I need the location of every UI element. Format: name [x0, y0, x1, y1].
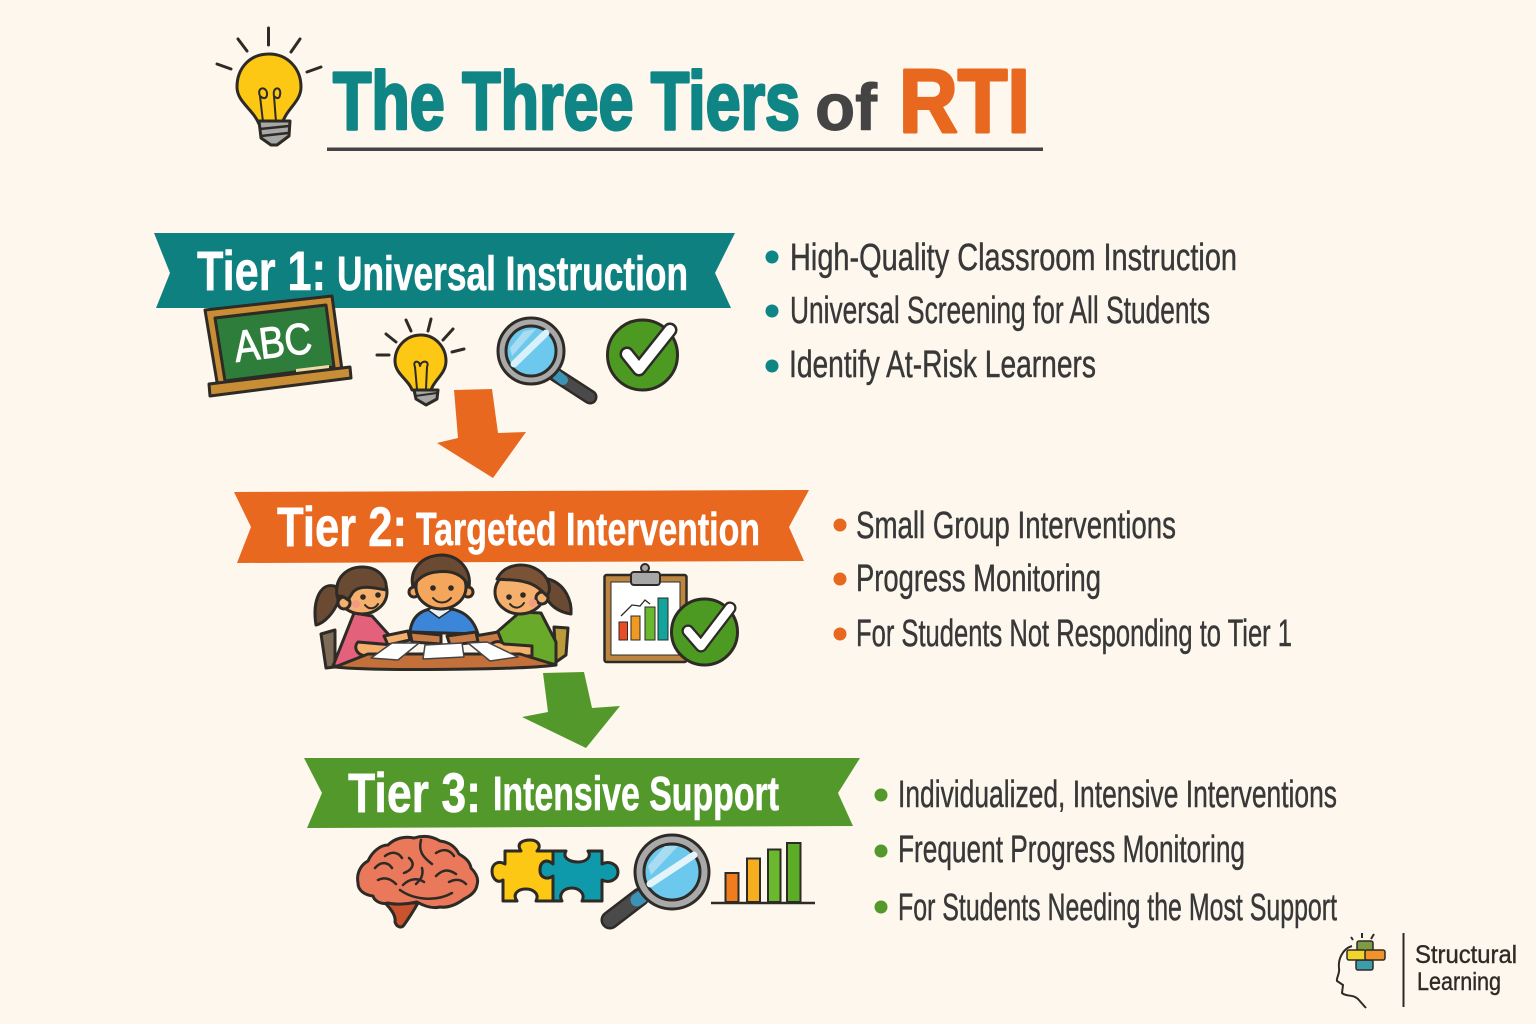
panel: tier 1 banner	[154, 233, 735, 308]
icon: students around a table	[315, 555, 571, 669]
panel: tier 3 banner: Tier 3:	[348, 761, 481, 824]
panel: tier 1 banner: Tier 1:	[197, 239, 326, 302]
tier 1 bullet list: High-Quality Classroom Instruction	[790, 237, 1237, 279]
tier 2 bullet list: Progress Monitoring	[856, 558, 1101, 600]
title: The Three Tiers	[333, 56, 800, 147]
icon: large magnifying glass	[610, 835, 709, 920]
tier 1 bullet list: Identify At-Risk Learners	[789, 344, 1096, 386]
arrow: tier 1 to tier 2	[437, 389, 526, 478]
logo: Structural Learning: Structural	[1415, 941, 1517, 969]
icon: magnifying glass	[498, 318, 590, 397]
tier 1 bullet list	[766, 237, 1237, 386]
panel: tier 3 banner: Intensive Support	[493, 768, 779, 821]
tier 1 bullet list: Universal Screening for All Students	[790, 290, 1210, 332]
icon: puzzle pieces	[492, 840, 618, 901]
tier 2 bullet list	[834, 505, 1292, 655]
panel: tier 2 banner: Targeted Intervention	[416, 503, 760, 555]
icon: title light bulb	[217, 28, 321, 145]
tier 3 bullet list	[874, 774, 1337, 929]
papers	[371, 642, 518, 661]
icon: green check badge	[608, 320, 678, 390]
arrow: tier 2 to tier 3	[522, 672, 620, 748]
student: right girl	[475, 565, 571, 664]
panel: tier 3 banner	[304, 758, 860, 828]
icon: chalkboard: ABC	[231, 314, 315, 372]
icon: light bulb	[377, 319, 464, 405]
icon: clipboard with chart	[604, 564, 738, 665]
chairs	[321, 627, 568, 668]
logo: Structural Learning: Learning	[1417, 968, 1501, 996]
icon: brain	[358, 836, 478, 927]
student: left girl	[315, 567, 410, 666]
icon: bar chart	[711, 843, 815, 903]
table	[335, 654, 556, 669]
tier 3 bullet list: Frequent Progress Monitoring	[898, 829, 1245, 871]
tier 2 bullet list: Small Group Interventions	[856, 505, 1176, 547]
panel: tier 2 banner: Tier 2:	[277, 495, 407, 558]
arms of middle boy	[410, 632, 478, 645]
panel: tier 2 banner	[234, 490, 809, 563]
panel: tier 1 banner: Universal Instruction	[337, 248, 688, 301]
student: middle boy	[409, 555, 478, 634]
tier 3 bullet list: Individualized, Intensive Interventions	[898, 774, 1337, 816]
title: RTI	[899, 52, 1030, 152]
logo: Structural Learning	[1337, 933, 1517, 1008]
icon: chalkboard	[205, 296, 351, 396]
title: of	[815, 70, 878, 144]
title underline	[327, 148, 1043, 151]
tier 2 bullet list: For Students Not Responding to Tier 1	[856, 613, 1292, 655]
